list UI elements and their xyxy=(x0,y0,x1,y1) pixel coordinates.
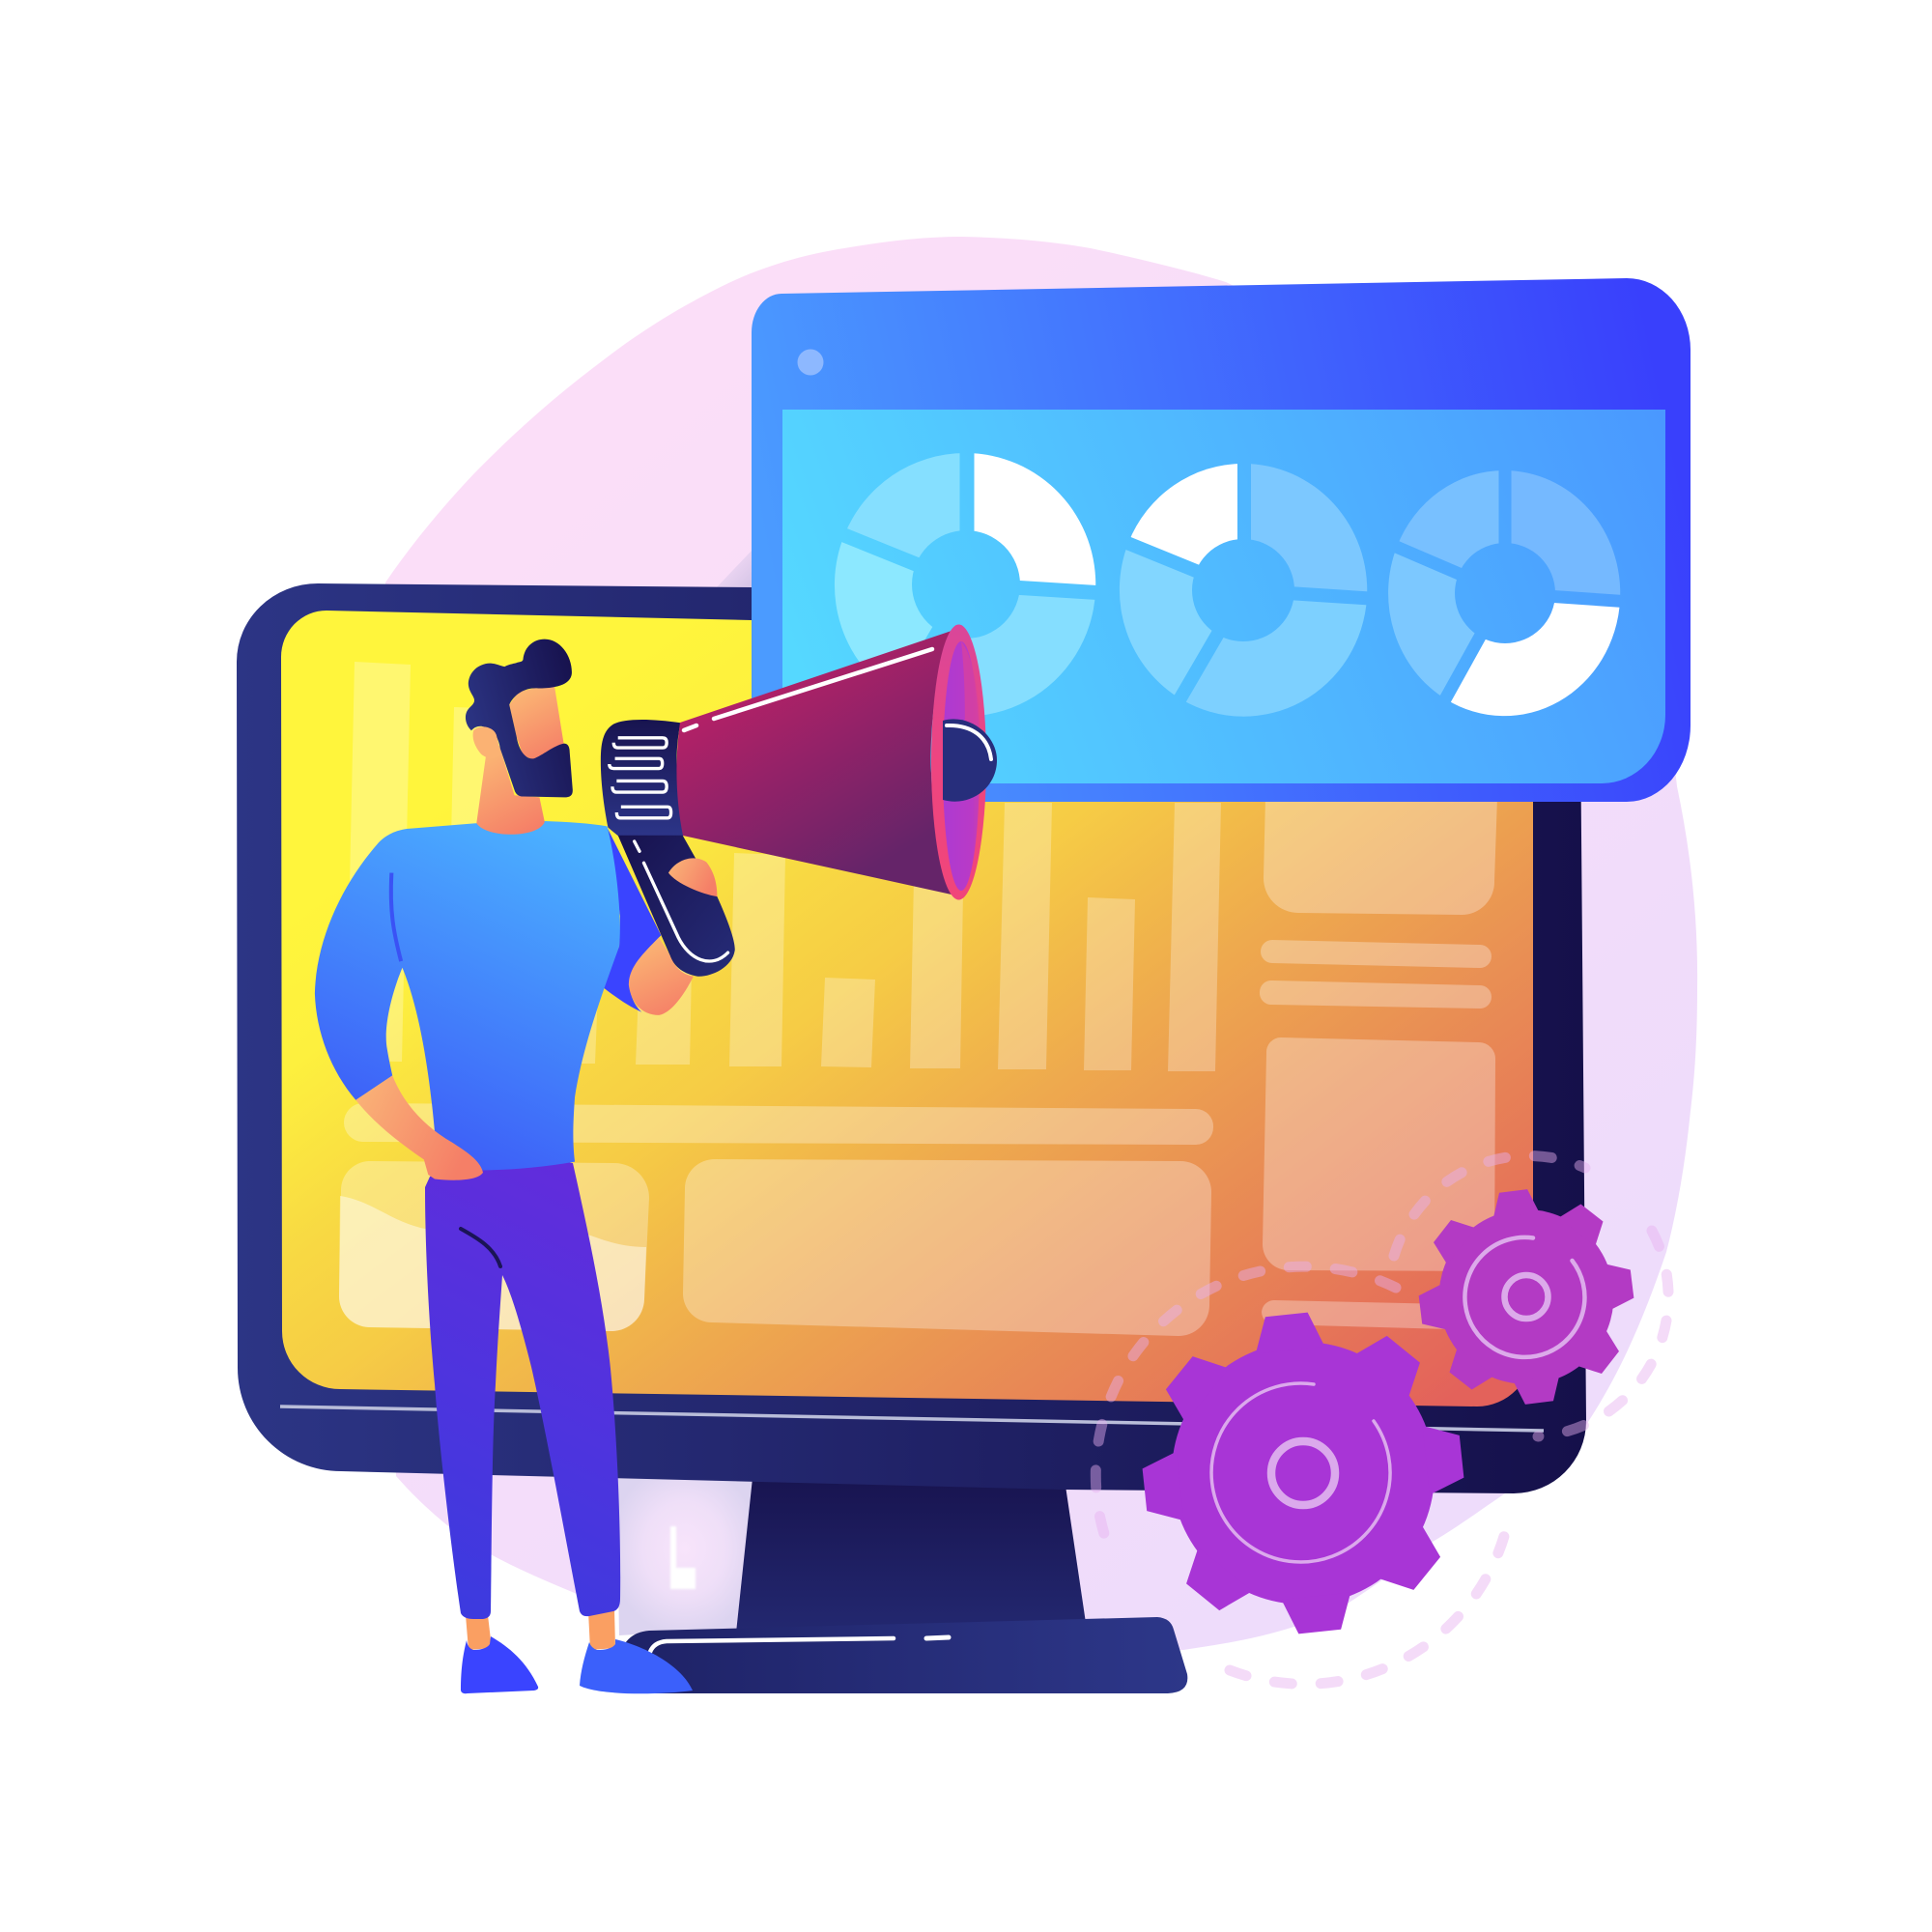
face xyxy=(509,687,564,760)
torso and arms traced in 0.4464 scale xyxy=(315,639,735,1180)
screen content: small bottom bar xyxy=(1262,1300,1449,1329)
monitor highlight line xyxy=(280,1406,1544,1431)
screen content: top right card xyxy=(1264,797,1497,915)
window shadow on blob xyxy=(715,551,752,589)
left shoe xyxy=(461,1636,538,1693)
megaphone rear xyxy=(601,720,684,836)
monitor stand xyxy=(736,1478,1086,1633)
small gear xyxy=(1407,1178,1645,1416)
back sleeve xyxy=(603,828,661,1012)
screen content: text lines xyxy=(1260,940,1492,1009)
forearm in pocket xyxy=(355,1075,483,1180)
screen content: area chart card xyxy=(339,1161,649,1331)
horn body xyxy=(676,631,952,895)
large gear xyxy=(1128,1298,1478,1648)
background blob xyxy=(385,237,1697,1650)
trouser crease xyxy=(461,1229,500,1266)
monitor screen xyxy=(281,611,1533,1406)
window dot xyxy=(798,350,823,375)
glow panel beside monitor stand xyxy=(616,1478,753,1635)
screen content: centre card xyxy=(683,1159,1211,1336)
pie chart 2 xyxy=(1118,454,1378,717)
screen content: wide bar xyxy=(344,1103,1213,1145)
handle highlights xyxy=(635,841,728,961)
pie chart 1 xyxy=(835,444,1105,717)
upper fingers xyxy=(668,858,717,896)
neck xyxy=(476,746,545,835)
megaphone bell xyxy=(676,624,997,900)
window frame xyxy=(752,278,1690,802)
trousers xyxy=(425,1150,620,1619)
megaphone handle xyxy=(618,836,735,977)
shirt xyxy=(315,821,620,1171)
screen content: bar chart xyxy=(346,662,1221,1071)
monitor body xyxy=(237,583,1586,1493)
hair and beard xyxy=(466,639,573,797)
right shoe xyxy=(580,1639,693,1693)
screen content: tall card xyxy=(1263,1037,1495,1271)
monitor base xyxy=(618,1617,1187,1693)
shirt fold xyxy=(391,873,401,961)
man figure xyxy=(315,639,735,1693)
lower hand xyxy=(629,938,694,1015)
right ankle xyxy=(588,1609,615,1650)
horn highlight xyxy=(684,649,932,730)
browser window xyxy=(752,278,1690,802)
window content panel xyxy=(782,410,1665,783)
pie chart 3 xyxy=(1387,461,1631,716)
inner cone xyxy=(943,641,980,891)
left ankle xyxy=(466,1615,492,1650)
ear xyxy=(473,726,501,758)
speaker cap xyxy=(943,719,997,802)
cap highlight xyxy=(947,725,991,759)
inner cone pink reflection xyxy=(961,641,980,744)
megaphone slots xyxy=(610,738,671,818)
dashed orbit paths xyxy=(1095,1155,1668,1684)
rim xyxy=(931,624,986,900)
